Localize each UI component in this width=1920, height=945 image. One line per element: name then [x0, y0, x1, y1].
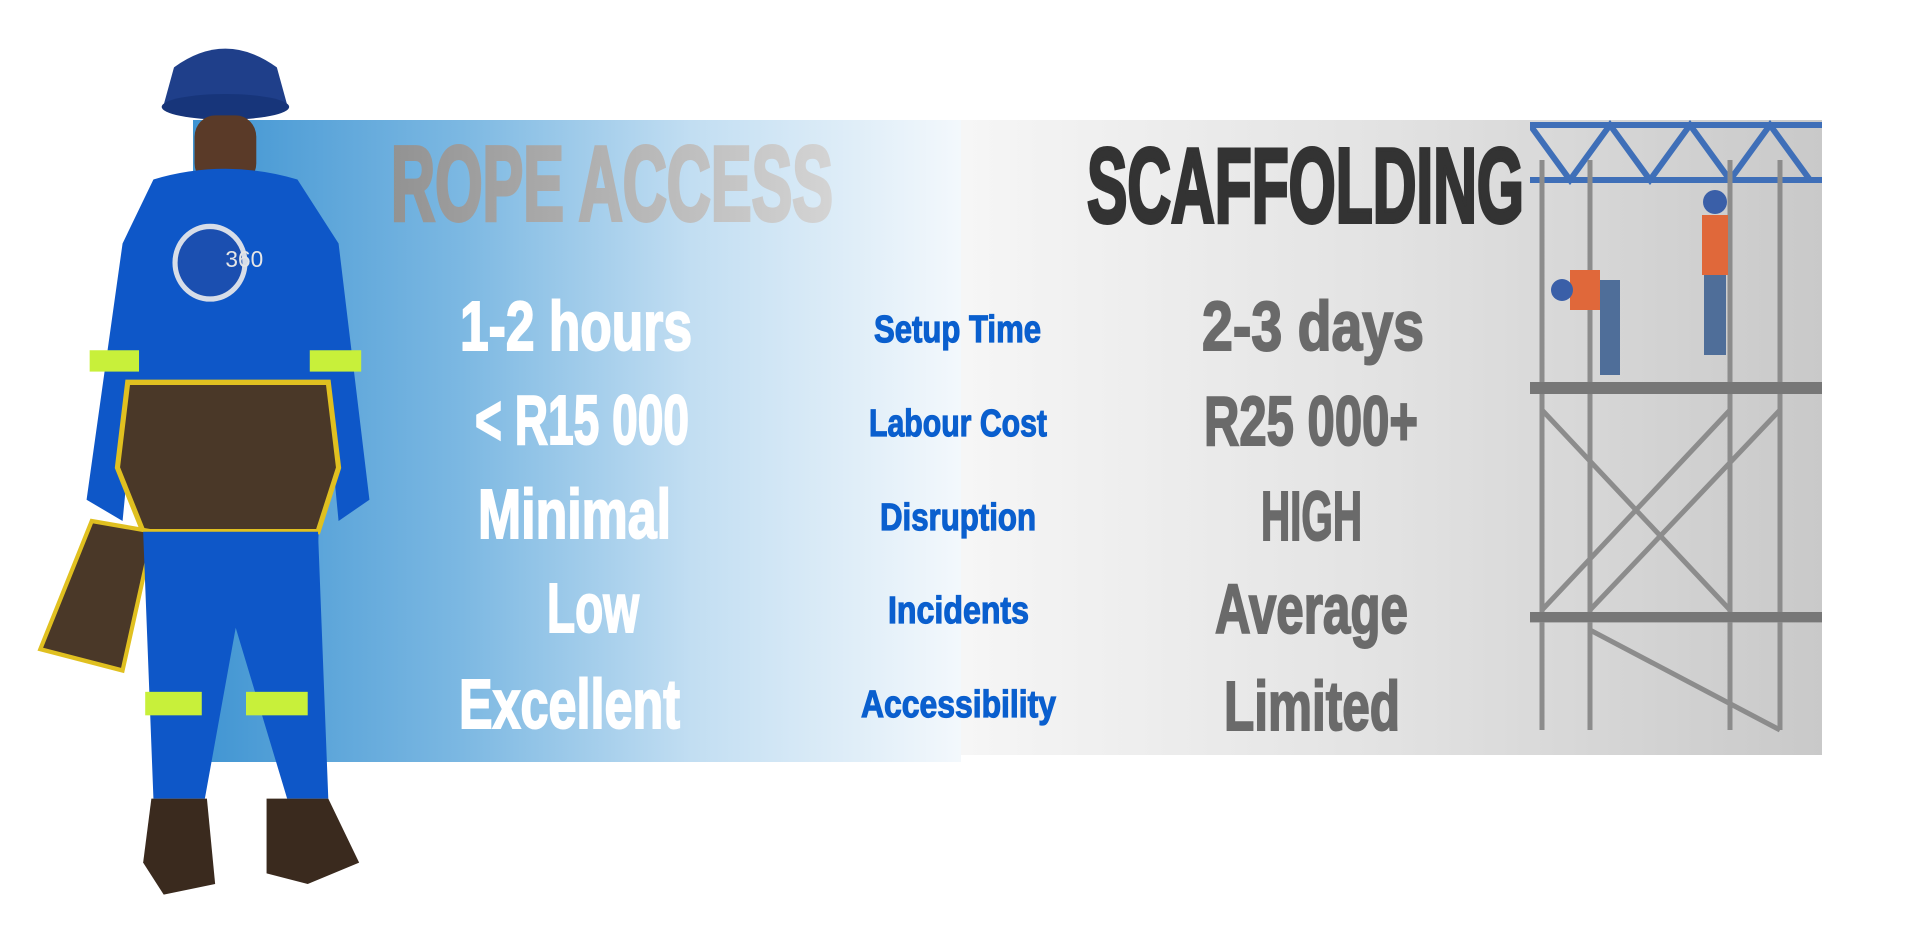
boots — [143, 799, 215, 895]
comparison labels: Disruption — [880, 497, 1036, 539]
workers — [1551, 190, 1728, 375]
title: scaffolding: SCAFFOLDING — [1087, 127, 1524, 245]
scaffolding values: 2-3 days — [1202, 287, 1424, 365]
rope access values: 1-2 hours — [460, 287, 692, 365]
scaffolding values: Limited — [1224, 667, 1400, 745]
image: rope access worker — [38, 48, 370, 895]
rope access values: Excellent — [459, 665, 680, 743]
comparison labels: Incidents — [888, 590, 1029, 632]
head/neck — [195, 115, 256, 185]
comparison labels: Accessibility — [861, 684, 1056, 726]
scaffolding values: HIGH — [1261, 477, 1362, 555]
rope access values — [459, 287, 692, 743]
comparison labels — [861, 309, 1056, 726]
rope access values: < R15 000 — [475, 381, 689, 459]
comparison labels: Labour Cost — [869, 403, 1047, 445]
scaffolding values — [1202, 287, 1424, 745]
title: rope access: ROPE ACCESS — [391, 125, 833, 243]
harness — [117, 382, 339, 532]
logo — [175, 226, 245, 299]
scaffolding values: Average — [1215, 570, 1408, 648]
panel: scaffolding gray background — [961, 120, 1822, 755]
rope access values: Minimal — [478, 475, 671, 553]
trousers — [143, 532, 328, 799]
comparison labels: Setup Time — [874, 309, 1041, 351]
hat — [164, 49, 287, 110]
rope access values: Low — [547, 569, 639, 647]
panel: rope access blue background — [193, 120, 961, 762]
image: rope access worker: 360 — [225, 246, 263, 272]
reflective bands — [90, 350, 139, 372]
scaffolding values: R25 000+ — [1204, 382, 1418, 460]
jacket — [87, 169, 369, 542]
image: scaffolding with workers — [1530, 120, 1822, 732]
